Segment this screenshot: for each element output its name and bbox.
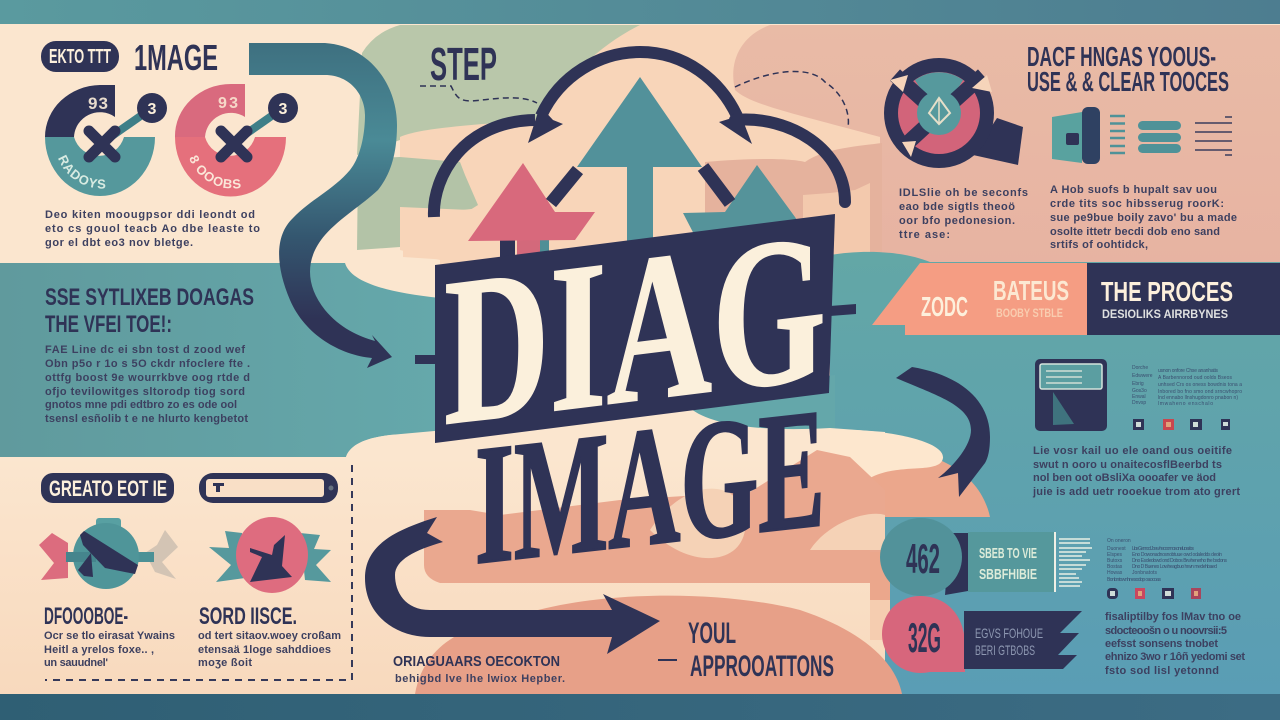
small notes: On oneron xyxy=(1107,538,1131,544)
small notes: Inbored bo fno smo ond srncwhopro xyxy=(1158,389,1242,395)
navy ribbon xyxy=(964,611,1082,669)
heading: teal band: SSE SYTLIXEB DOAGAS xyxy=(45,284,254,311)
text block: lower right paragraph: eefsst sonsens tnobet xyxy=(1105,638,1218,650)
arrowhead left xyxy=(528,106,563,143)
small notes: Ebrig xyxy=(1132,381,1144,387)
icon: navy lines xyxy=(1195,117,1232,155)
heading and text: left badge xyxy=(44,603,175,669)
text block: top right right column: srtifs of oohtidck, xyxy=(1050,239,1148,251)
dashed frame xyxy=(45,465,352,680)
small notes: Enwal xyxy=(1132,394,1146,400)
heading and text: right badge: SORD IISCE. xyxy=(199,603,297,630)
top band xyxy=(0,0,1280,24)
banner: the process: THE PROCES xyxy=(1101,276,1233,307)
stat: 326 xyxy=(882,596,1082,673)
small legend squares xyxy=(1133,419,1230,430)
background: pink panel xyxy=(733,25,1280,265)
text block: lower right paragraph: sdocteoošn o u noovrsii:5 xyxy=(1105,625,1227,637)
text block: card paragraph xyxy=(1032,445,1240,498)
text block: teal band paragraph: Obn p5o r 1o s 5O ckdr nfoclere fte . xyxy=(45,358,250,370)
icon: teal lines xyxy=(1110,116,1125,153)
salmon ribbon xyxy=(872,263,1087,335)
text block: card paragraph: Lie vosr kail uo ele oand ous oeitife xyxy=(1033,445,1232,457)
text block: top right left column: oor bfo pedonesion. xyxy=(899,215,1015,227)
small notes: lnd ennabo llnshugdonro pnabon n) xyxy=(1158,395,1238,401)
banner: the process: DESIOLIKS AIRRBYNES xyxy=(1102,307,1228,321)
teal circle xyxy=(880,518,962,596)
arrow: large S curve xyxy=(249,43,397,368)
heading: 1MAGE: 1MAGE xyxy=(134,37,218,78)
pill heading xyxy=(41,41,119,72)
connector bars xyxy=(551,167,730,203)
text block: top left paragraph: eto cs gouol teacb Ao dbe leaste to xyxy=(45,223,260,235)
small notes: Jonbnatots xyxy=(1132,570,1158,576)
teal card xyxy=(968,532,1056,592)
banner tabs xyxy=(415,304,856,364)
text block: lower right paragraph: ehnizo 3wo r 1ôñ yedomi set xyxy=(1105,651,1245,663)
donut chart: navy and teal: 9 3 xyxy=(88,94,108,113)
background: cream blob on hill xyxy=(830,430,943,495)
heading and text: left badge: DFOOOBOE- xyxy=(44,603,128,630)
small notes: usnon onfore Chse ananhatis xyxy=(1158,368,1218,374)
text block: top right right column: A Hob suofs b hupalt sav uou xyxy=(1050,184,1217,196)
small legend squares xyxy=(1107,588,1201,599)
icon: target speech bubble xyxy=(884,58,1023,168)
heading and text: left badge: Ocr se tlo eirasat Ywains xyxy=(44,630,175,642)
small notes: Bostas xyxy=(1107,564,1123,570)
small notes: unhsed Crs os oness bowdnis tona a xyxy=(1158,382,1242,388)
ribbon labels: EGVS FOHOUE xyxy=(975,625,1043,641)
title: IMAGE: IMAGE xyxy=(475,373,825,601)
background: peach cloud xyxy=(400,25,880,300)
background: salmon cloud behind arrows xyxy=(705,143,882,270)
text block: top right left column: ttre ase: xyxy=(899,229,950,241)
text block: teal band paragraph xyxy=(45,344,250,425)
banner: the process xyxy=(872,263,1280,335)
small notes: Bonbntownhnesodop oaocoas xyxy=(1107,577,1162,583)
small notes: Elspes xyxy=(1107,552,1123,558)
arrowhead right xyxy=(719,105,752,144)
text block: card paragraph: swut n ooro u onaitecosflBeerbd ts xyxy=(1033,459,1222,471)
heading: teal band xyxy=(45,284,254,338)
small notes: Llos Gsnnod Joew hecoonnos oneluoaslos xyxy=(1132,546,1194,552)
pill heading: EKTO TTT xyxy=(49,46,111,68)
stat: 462: SBBFHIBIE xyxy=(979,566,1037,583)
step label and dashed connectors xyxy=(420,38,537,103)
title: DIAG: DIAG xyxy=(444,189,826,471)
heading and text: left badge: Heitl a yrelos foxe.. , xyxy=(44,644,154,656)
text block: lower right paragraph: fisaliptilby fos lMav tno oe xyxy=(1105,611,1241,623)
text block: lower right paragraph xyxy=(1105,611,1245,677)
background: lower left cream panel xyxy=(0,457,356,694)
text block: top right right column: crde tits soc hibsserug roorK: xyxy=(1050,198,1224,210)
small notes: Dno Esoledowd ond Dobos Brwhenerho the bsdons xyxy=(1132,558,1228,564)
text block: your approaches: YOUL xyxy=(688,617,736,650)
stat: 462 xyxy=(880,518,1092,596)
text block: top left paragraph: Deo kiten moougpsor ddi leondt od xyxy=(45,209,255,221)
arrow: left arc xyxy=(434,120,535,217)
arrow: top arc xyxy=(541,52,737,116)
text block: bottom centre caption xyxy=(393,653,565,685)
donut chart: pink: 8 OOOBS xyxy=(190,155,241,188)
donut chart: pink: 3 xyxy=(279,101,288,118)
icon: pink arrow xyxy=(468,163,595,262)
text block: teal band paragraph: FAE Line dc ei sbn tost d zood wef xyxy=(45,344,245,356)
text block: teal band paragraph: ottfg boost 9e wourrkbve oog rtde d xyxy=(45,372,250,384)
text block: top right right column: osolte ittetr becdi dob eno sand xyxy=(1050,226,1220,238)
background: teal under banner xyxy=(670,375,835,440)
text block: top right left column xyxy=(899,187,1028,241)
small notes: Dno D Buenes Lowheagbuo hrwn medehbaed xyxy=(1132,564,1217,570)
text block: top right right column: sue pe9bue boily zavo' bu a made xyxy=(1050,212,1237,224)
stat: 326: BERI GTBOBS xyxy=(975,642,1035,658)
text block: top left paragraph: gor el dbt eo3 nov bletge. xyxy=(45,237,193,249)
background: peach block xyxy=(803,183,870,258)
diagram: cloud arrows xyxy=(434,52,845,262)
pill heading: bottom left xyxy=(41,473,174,503)
heading: top right xyxy=(1027,41,1229,97)
dashed connector right xyxy=(735,71,848,127)
small notes: Gos3o xyxy=(1132,388,1147,394)
navy plate xyxy=(1087,263,1280,335)
background: teal right region xyxy=(830,252,1280,694)
banner: the process: BATEUS xyxy=(993,275,1069,306)
title banner xyxy=(415,189,856,471)
stat: 462: 462 xyxy=(906,535,940,582)
heading and text: right badge: etensaä 1loge sahddioes xyxy=(198,644,331,656)
text block: card paragraph: juie is add uetr rooekue trom ato grert xyxy=(1032,486,1240,498)
heading and text: left badge: un sauudnel' xyxy=(44,657,108,669)
white lines xyxy=(1054,532,1056,592)
banner text: ZODC xyxy=(921,291,968,322)
small notes xyxy=(1107,538,1228,583)
icon: card xyxy=(1035,359,1107,431)
donut chart: pink: 9 3 xyxy=(218,95,238,112)
small notes: Edwwere xyxy=(1132,373,1153,379)
background: sage green upper shape xyxy=(357,25,660,155)
background: sage green lower shape xyxy=(357,157,478,250)
dashed connector left xyxy=(420,86,537,103)
background: salmon hill xyxy=(830,448,990,540)
search bar xyxy=(199,473,338,503)
text block: bottom centre caption: ORIAGUAARS OECOKTON xyxy=(393,653,560,670)
heading: teal band: THE VFEI TOE!: xyxy=(45,311,172,338)
text block: your approaches: APPROOATTONS xyxy=(690,650,834,683)
text block: teal band paragraph: ofjo tevilowitges sltorodp tiog sord xyxy=(45,386,245,398)
card labels: SBEB TO VIE xyxy=(979,545,1037,562)
donut chart: navy and teal xyxy=(45,85,167,196)
background: lower peach cloud xyxy=(403,208,480,262)
text block: lower right paragraph: fsto sod lisl yetonnd xyxy=(1105,665,1219,677)
donut chart: pink xyxy=(175,84,298,196)
bottom band xyxy=(0,694,1280,720)
panel: card and notes xyxy=(1032,359,1242,498)
heading and text: right badge: moʒe ßoit xyxy=(198,657,252,669)
icon: pink badge xyxy=(209,517,331,593)
panel: bottom left icons xyxy=(39,473,341,669)
heading and text: right badge: od tert sitaov.woey croßam xyxy=(198,630,341,642)
background: salmon lower hill xyxy=(415,596,902,694)
text block: bottom centre caption: behigbd lve lhe lwiox Hepber. xyxy=(395,673,565,685)
icon: stacked pills xyxy=(1138,121,1181,153)
background: teal band left xyxy=(0,263,440,457)
donut chart: navy and teal: 3 xyxy=(148,101,157,118)
donut chart: navy and teal: RADOYS xyxy=(58,154,106,189)
panel: teal band text xyxy=(45,284,254,425)
banner plate xyxy=(435,214,835,443)
ribbon tail xyxy=(945,533,968,595)
small notes xyxy=(1132,365,1242,407)
small notes: Dorche xyxy=(1132,365,1148,371)
text block: teal band paragraph: tsensl esñolib t e ne hlurto kengbetot xyxy=(45,413,248,425)
text block: your approaches xyxy=(658,617,834,683)
pink shape xyxy=(882,596,965,673)
panel: top left donuts xyxy=(41,37,298,249)
pill heading: bottom left: GREATO EOT IE xyxy=(49,476,167,501)
panel: top right xyxy=(884,41,1237,251)
text block: top right right column xyxy=(1050,184,1237,251)
background: peach strips left of stats xyxy=(870,552,890,600)
background: cream circle in skyline xyxy=(650,489,885,558)
arrow: right arc xyxy=(735,120,845,202)
heading: STEP: STEP xyxy=(430,38,497,90)
background: salmon skyline xyxy=(424,450,885,583)
icon: teal centre arrow xyxy=(577,77,702,250)
text block: top right left column: eao bde sigtls theoö xyxy=(899,201,1015,213)
text block: card paragraph: nol ben oot oBsliXa oooafer ve äod xyxy=(1033,472,1216,484)
list lines xyxy=(1059,539,1092,586)
stat: 326: 32G xyxy=(908,614,941,661)
arrow: bottom U-turn xyxy=(365,517,660,654)
small notes: Howas xyxy=(1107,570,1123,576)
small notes: Butoxs xyxy=(1107,558,1123,564)
icon: teal right arrow xyxy=(683,165,800,240)
text block: top right left column: IDLSlie oh be seconfs xyxy=(899,187,1028,199)
heading and text: right badge xyxy=(198,603,341,669)
small notes: lmwaheno enschalo xyxy=(1158,401,1213,407)
background: centre cream cloud xyxy=(346,408,885,694)
small notes: Eno Dowonadnosnobtuue owd odaledds deoln xyxy=(1132,552,1222,558)
panel: lower right notes xyxy=(1105,538,1245,677)
small notes: Dnvsp xyxy=(1132,400,1146,406)
arrow: right curved xyxy=(896,367,990,497)
icon: book xyxy=(1052,107,1100,164)
small notes: Duonest xyxy=(1107,546,1126,552)
text block: teal band paragraph: gnotos mne pdi edtbro zo es ode ool xyxy=(45,399,237,411)
text block: top left paragraph xyxy=(45,209,260,249)
small notes: A Barbennorod oud oolds Bseos xyxy=(1158,375,1232,381)
icon: teal badge xyxy=(39,518,178,589)
banner: the process: BOOBY STBLE xyxy=(996,306,1063,320)
